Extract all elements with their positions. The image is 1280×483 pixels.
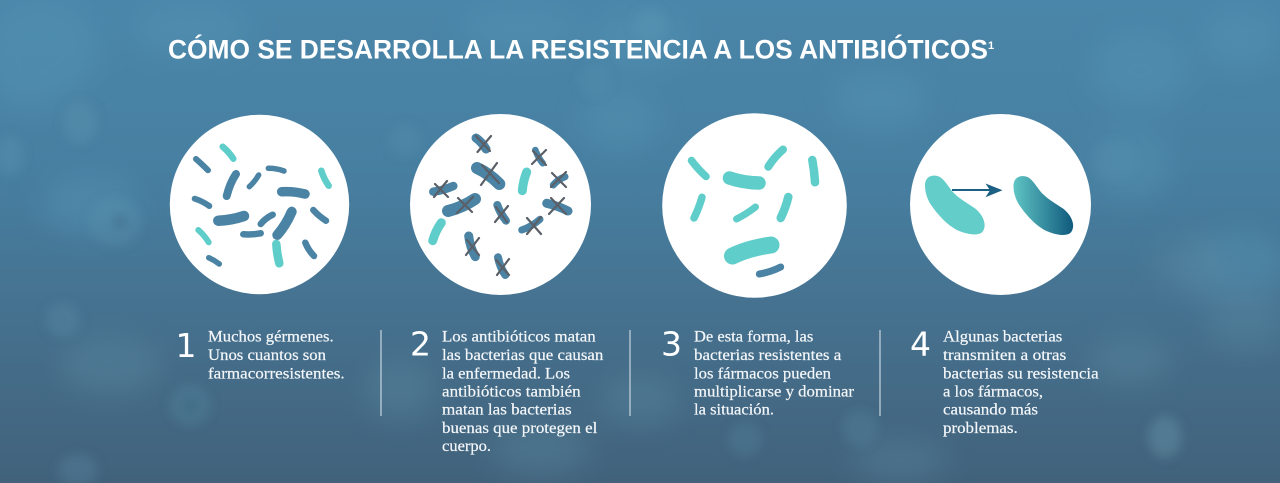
description 2: buenas que protegen el [442, 420, 597, 437]
step 3 text [661, 324, 855, 419]
description 4: Algunas bacterias [943, 329, 1062, 346]
number 3: 3 [661, 324, 682, 364]
description 3: bacterias resistentes a [694, 347, 841, 364]
step 1 text [176, 326, 345, 382]
bacteria: killed and surviving [433, 138, 568, 275]
description 1: farmacorresistentes. [208, 365, 345, 382]
panel: step 1 illustration [170, 115, 349, 294]
description 2: Los antibióticos matan [442, 329, 596, 346]
description 4: problemas. [943, 420, 1018, 437]
description 2: antibióticos también [442, 384, 581, 400]
bacterium: resistant donor [925, 176, 985, 234]
bacteria: many germs [195, 147, 329, 264]
title: CÓMO SE DESARROLLA LA RESISTENCIA A LOS ANTIBIÓTICOS [168, 34, 988, 64]
panel: step 3 illustration [662, 113, 847, 298]
number 4: 4 [910, 324, 931, 364]
arrow: transfer [952, 184, 1002, 197]
description 3 [694, 329, 855, 419]
number 1: 1 [176, 326, 196, 365]
description 3: multiplicarse y dominar [694, 384, 855, 400]
step 4 text [910, 324, 1099, 437]
description 3: De esta forma, las [694, 329, 813, 346]
description 2: cuerpo. [442, 438, 491, 455]
panel: step 4 illustration [910, 114, 1091, 295]
bacteria: resistant multiply [692, 150, 815, 274]
description 2: la enfermedad. Los [442, 365, 570, 382]
description 2: las bacterias que causan [442, 347, 604, 364]
description 2 [442, 329, 604, 455]
description 3: los fármacos pueden [694, 365, 831, 382]
number 2: 2 [410, 324, 431, 364]
description 3: la situación. [694, 402, 774, 419]
description 4: transmiten a otras [943, 347, 1066, 364]
icons: cross marks [434, 136, 566, 275]
description 1: Muchos gérmenes. [208, 329, 334, 346]
description 4 [943, 329, 1099, 437]
description 4: bacterias su resistencia [943, 365, 1099, 382]
description 1 [208, 329, 345, 382]
bacterium: receiving resistance [1013, 176, 1073, 235]
description 1: Unos cuantos son [208, 347, 326, 364]
step 2 text [410, 324, 604, 455]
panel: step 2 illustration [410, 114, 591, 295]
description 4: causando más [943, 402, 1038, 419]
title: 1 [988, 40, 994, 52]
description 2: matan las bacterias [442, 402, 572, 419]
description 4: a los fármacos, [943, 384, 1043, 400]
